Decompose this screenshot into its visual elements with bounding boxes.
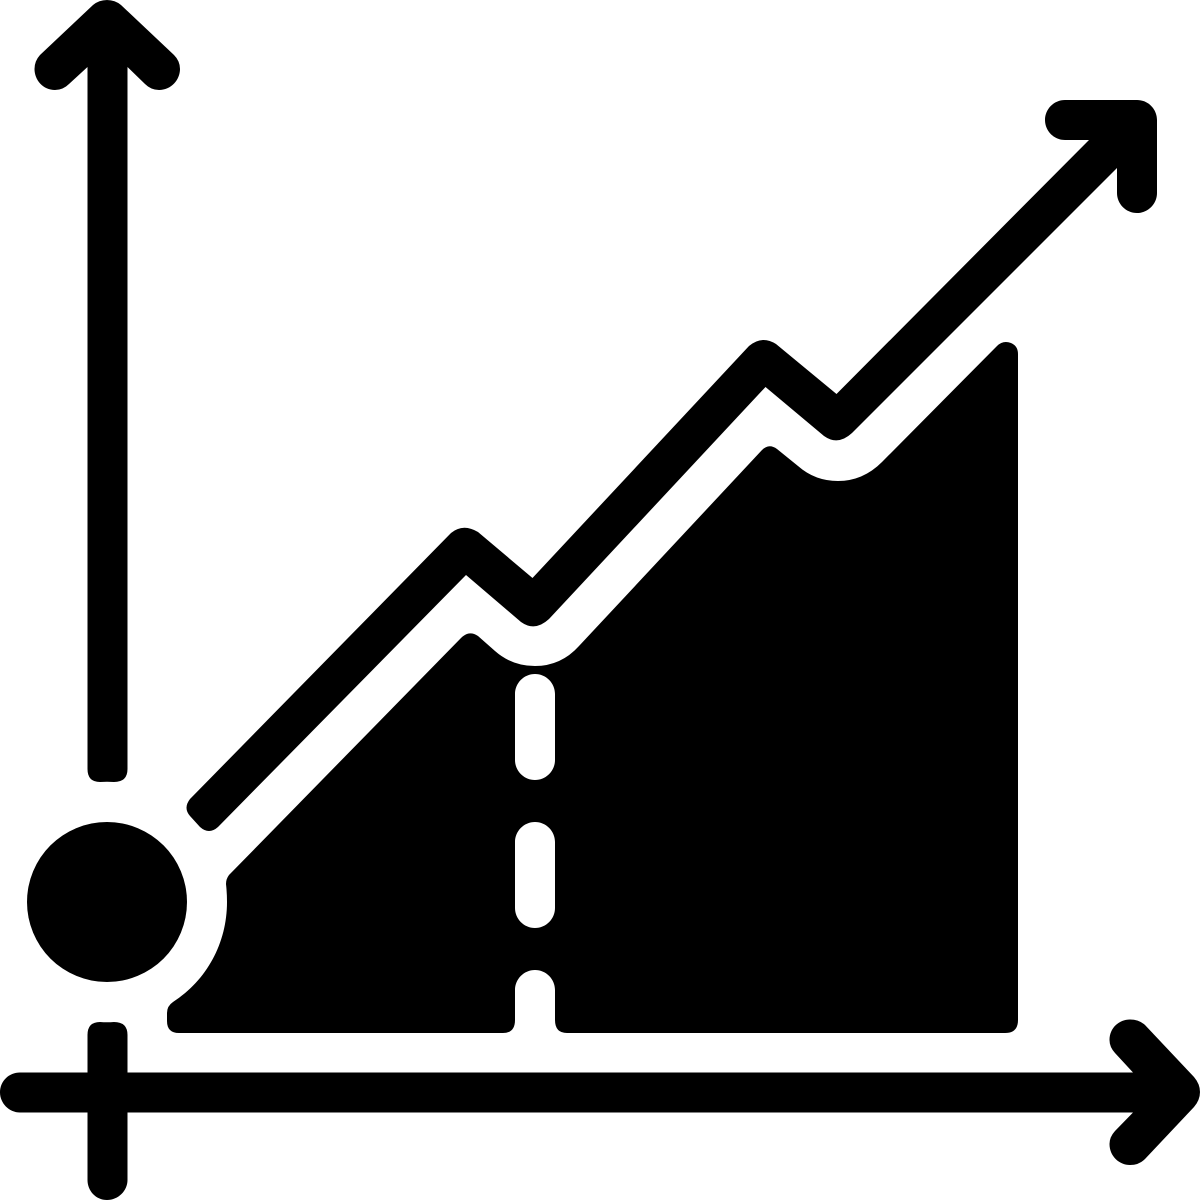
vertical axis with arrow	[34, 0, 180, 782]
rising trend arrow	[186, 100, 1157, 831]
horizontal axis with arrow and lower vertical stub	[0, 1020, 1200, 1200]
origin circle	[27, 822, 187, 982]
filled area under the trend with dashed marker	[167, 342, 1018, 1033]
